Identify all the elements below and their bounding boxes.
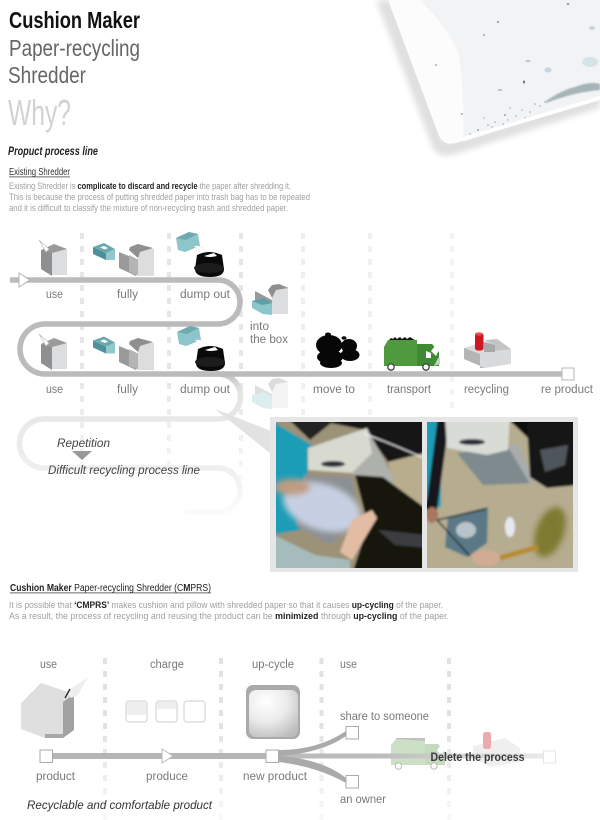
heading: why: Why?: [8, 92, 71, 133]
title: Shredder: [8, 62, 86, 88]
stage labels: cmprs top: up-cycle: [252, 659, 294, 671]
icon: faded into the box: [252, 378, 288, 409]
text block: existing shredder description: [9, 181, 310, 214]
title: [8, 7, 140, 88]
stage labels: row 2: [46, 384, 594, 396]
stage labels: row 1: the box: [250, 334, 288, 346]
icon: dump out row 1: [176, 232, 224, 277]
heading: product process line: Propuct process line: [8, 146, 98, 158]
callout: delete the process: Delete the process: [430, 752, 524, 764]
produce arrow: [162, 749, 173, 763]
title: Cushion Maker: [9, 7, 140, 33]
text block: cmprs description: As a result, the process of recycling and reusing the product can be minimized through up-cycling of the paper.: [9, 611, 449, 622]
icon: full shredder row 1: [119, 244, 154, 276]
stage labels: cmprs bottom: produce: [146, 771, 188, 783]
dashed stage dividers: cmprs process: [105, 658, 449, 820]
stage labels: row 2: re product: [541, 384, 594, 396]
dashed stage dividers: existing process: [82, 233, 452, 480]
text block: existing shredder description: Existing Shredder is complicate to discard and recycle the paper after shredding it.: [9, 181, 291, 192]
icon: truck: [384, 337, 440, 370]
caption: recyclable and comfortable product: Recyclable and comfortable product: [27, 798, 213, 812]
cmprs process line: [40, 726, 556, 788]
stage labels: cmprs bottom: new product: [243, 771, 308, 783]
photo: sweeping shredded paper: [427, 422, 573, 568]
stage labels: row 2: fully: [117, 384, 138, 396]
stage labels: cmprs top: charge: [150, 659, 184, 671]
icon: full shredder row 2: [119, 338, 154, 370]
stage labels: cmprs bottom: an owner: [340, 794, 386, 806]
share node: [346, 726, 358, 739]
subheading: existing shredder: Existing Shredder: [9, 167, 71, 178]
stage labels: row 2: dump out: [180, 384, 231, 396]
stage labels: row 2: recycling: [464, 384, 509, 396]
stage labels: row 2: move to: [313, 384, 355, 396]
end node: [562, 368, 574, 380]
new product node: [266, 750, 278, 762]
faded repetition line: [20, 374, 241, 512]
photo: emptying shredder: [276, 422, 422, 568]
start arrow: [19, 273, 30, 287]
text block: cmprs description: [9, 600, 449, 622]
icon: recycling plant: [464, 332, 511, 368]
stage labels: cmprs bottom: product: [36, 771, 76, 783]
icon: full bin row 1: [93, 243, 115, 260]
icon: charge steps: [126, 701, 205, 722]
icon: up-cycled cushion: [246, 685, 300, 739]
stage labels: row 2: use: [46, 384, 63, 396]
subheading: cushion maker: Cushion Maker Paper-recycling Shredder (CMPRS): [10, 583, 211, 594]
stage labels: row 1: [46, 289, 288, 346]
icon: shredder use row 1: [39, 240, 67, 276]
faded recycling plant: [473, 732, 520, 767]
pillow product photo: [376, 0, 600, 156]
product node: [40, 750, 52, 762]
icon: full bin row 2: [93, 336, 115, 354]
icon: cushion maker shredder: [21, 677, 88, 738]
text block: existing shredder description: and it is difficult to classify the mixture of non-recycling trash and shredded paper.: [9, 203, 288, 214]
stage labels: cmprs bottom: [36, 711, 429, 806]
callout: repetition: [48, 436, 200, 477]
stage labels: cmprs top: [40, 659, 357, 671]
text block: cmprs description: It is possible that ‘CMPRS’ makes cushion and pillow with shredded paper so that it causes up-cycling of the paper.: [9, 600, 443, 611]
icon: trash bags: [316, 332, 360, 368]
text block: existing shredder description: This is because the process of putting shredded paper into trash bag has to be repeated: [9, 192, 310, 203]
icon: into the box: [252, 284, 288, 315]
stage labels: row 1: dump out: [180, 289, 231, 301]
icon: dump out row 2: [177, 326, 225, 371]
stage labels: cmprs top: use: [340, 659, 357, 671]
process line: [10, 273, 574, 380]
stage labels: row 1: fully: [117, 289, 138, 301]
stage labels: cmprs bottom: share to someone: [340, 711, 429, 723]
stage labels: cmprs top: use: [40, 659, 57, 671]
title: Paper-recycling: [9, 35, 140, 61]
end node: [544, 751, 556, 763]
icon: shredder use row 2: [39, 334, 67, 370]
photo callout wedge: [215, 409, 271, 454]
stage labels: row 1: use: [46, 289, 63, 301]
stage labels: row 2: transport: [387, 384, 432, 396]
panel: photos of existing shredder: [270, 416, 579, 574]
callout: repetition: Repetition: [57, 436, 110, 450]
owner node: [346, 776, 358, 788]
faded truck: [391, 738, 445, 769]
stage labels: row 1: into: [250, 321, 269, 333]
callout: repetition: Difficult recycling process line: [48, 463, 200, 477]
